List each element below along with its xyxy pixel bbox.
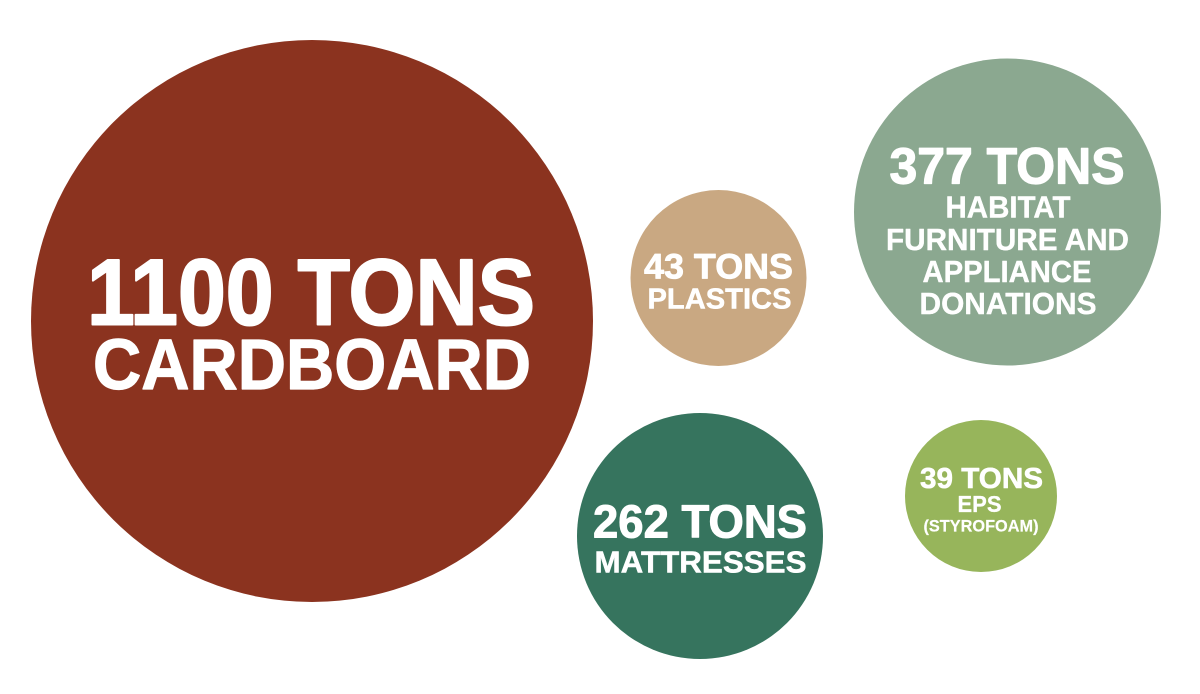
bubble: habitat furniture and appliance donations: [854, 58, 1161, 366]
bubble: EPS styrofoam: 39 TONS: [920, 463, 1043, 495]
bubble: mattresses: 262 TONS: [593, 496, 807, 548]
bubble: plastics: PLASTICS: [648, 284, 792, 316]
bubble: plastics: [630, 190, 806, 366]
bubble: mattresses: [577, 413, 823, 659]
bubble: habitat furniture and appliance donations: 377 TONS: [890, 138, 1124, 194]
bubble: EPS styrofoam: (STYROFOAM): [924, 516, 1038, 536]
bubble: EPS styrofoam: EPS: [958, 491, 1002, 517]
bubble: cardboard: CARDBOARD: [93, 326, 531, 405]
bubble: habitat furniture and appliance donations: DONATIONS: [920, 286, 1096, 321]
bubble: mattresses: MATTRESSES: [594, 544, 806, 580]
bubble: EPS styrofoam: [905, 420, 1057, 572]
bubble: cardboard: 1100 TONS: [87, 240, 535, 344]
bubble: habitat furniture and appliance donations: HABITAT: [946, 190, 1071, 224]
bubble: cardboard: [31, 40, 593, 602]
bubble: habitat furniture and appliance donations: APPLIANCE: [922, 254, 1092, 289]
bubble: plastics: 43 TONS: [644, 248, 793, 286]
bubble: habitat furniture and appliance donations: FURNITURE AND: [886, 222, 1129, 257]
